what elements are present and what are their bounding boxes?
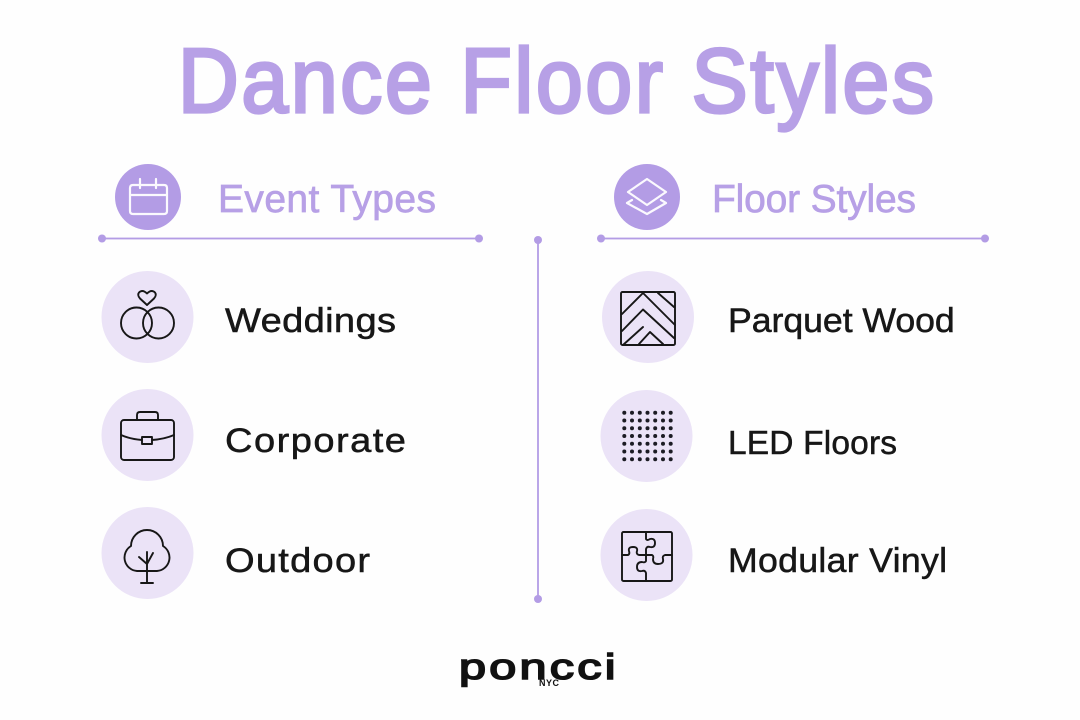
icon: puzzle [622,532,672,581]
logo wordmark: poncci [459,647,616,687]
icon: rings and heart [121,291,174,338]
divider: floor styles [597,234,989,242]
item: led floors [600,390,897,482]
item: outdoor [102,507,370,599]
item: corporate [102,389,406,481]
logo [459,647,616,688]
item: parquet wood [602,271,955,363]
panel: floor styles [597,164,989,601]
icon: parquet tile [621,292,675,345]
label: modular vinyl: Modular Vinyl [728,542,947,580]
icon: calendar badge [115,164,181,230]
label: outdoor: Outdoor [225,541,370,580]
label: led floors: LED Floors [728,425,897,462]
divider: event types [98,234,483,242]
central divider [534,236,542,603]
logo: nyc: NYC [539,678,560,688]
panel: event types [98,164,483,599]
heading: event types: Event Types [218,178,436,221]
heading: floor styles: Floor Styles [712,178,916,221]
icon: tree [125,530,169,583]
icon: led dot grid [622,411,673,461]
label: corporate: Corporate [225,421,406,460]
icon: layers badge [614,164,680,230]
title: Dance Floor Styles [178,30,934,132]
item: weddings [102,271,396,363]
item: modular vinyl [600,509,947,601]
icon: briefcase [121,412,174,460]
label: parquet wood: Parquet Wood [728,302,955,340]
label: weddings: Weddings [225,301,396,340]
